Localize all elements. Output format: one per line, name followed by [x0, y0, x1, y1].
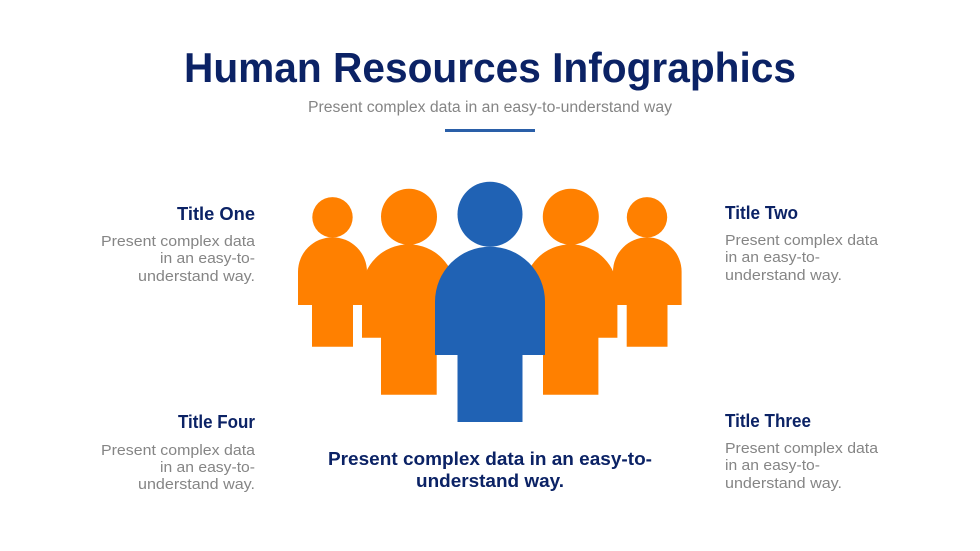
- text block: title three: [725, 411, 879, 492]
- text block: title two: in an easy-to-: [725, 249, 820, 266]
- people group illustration: [298, 182, 682, 422]
- text block: title four: Present complex data: [101, 442, 256, 459]
- text block: title four: [101, 412, 256, 493]
- text block: title one: in an easy-to-: [160, 250, 255, 267]
- text block: title three: Title Three: [725, 411, 811, 431]
- title: Human Resources Infographics: [184, 44, 796, 91]
- icon: medium person right: [524, 189, 617, 395]
- subtitle: Present complex data in an easy-to-understand way: [308, 99, 672, 116]
- text block: title two: [725, 203, 879, 284]
- text block: title one: Title One: [177, 204, 255, 224]
- icon: medium person left: [362, 189, 455, 395]
- icon: small person far right: [613, 197, 682, 347]
- text block: title four: Title Four: [178, 412, 255, 432]
- text block: title four: understand way.: [138, 476, 255, 493]
- bottom callout text: [328, 448, 652, 491]
- text block: title two: understand way.: [725, 267, 842, 284]
- text block: title three: in an easy-to-: [725, 457, 820, 474]
- text block: title three: Present complex data: [725, 440, 879, 457]
- text block: title two: Title Two: [725, 203, 798, 223]
- bottom callout text: understand way.: [416, 470, 564, 491]
- bottom callout text: Present complex data in an easy-to-: [328, 448, 652, 469]
- icon: small person far left: [298, 197, 367, 347]
- accent rule under subtitle: [445, 129, 535, 132]
- text block: title one: understand way.: [138, 268, 255, 285]
- text block: title two: Present complex data: [725, 232, 879, 249]
- text block: title three: understand way.: [725, 475, 842, 492]
- text block: title four: in an easy-to-: [160, 459, 255, 476]
- text block: title one: [101, 204, 256, 285]
- text block: title one: Present complex data: [101, 233, 256, 250]
- icon: central blue person: [435, 182, 545, 422]
